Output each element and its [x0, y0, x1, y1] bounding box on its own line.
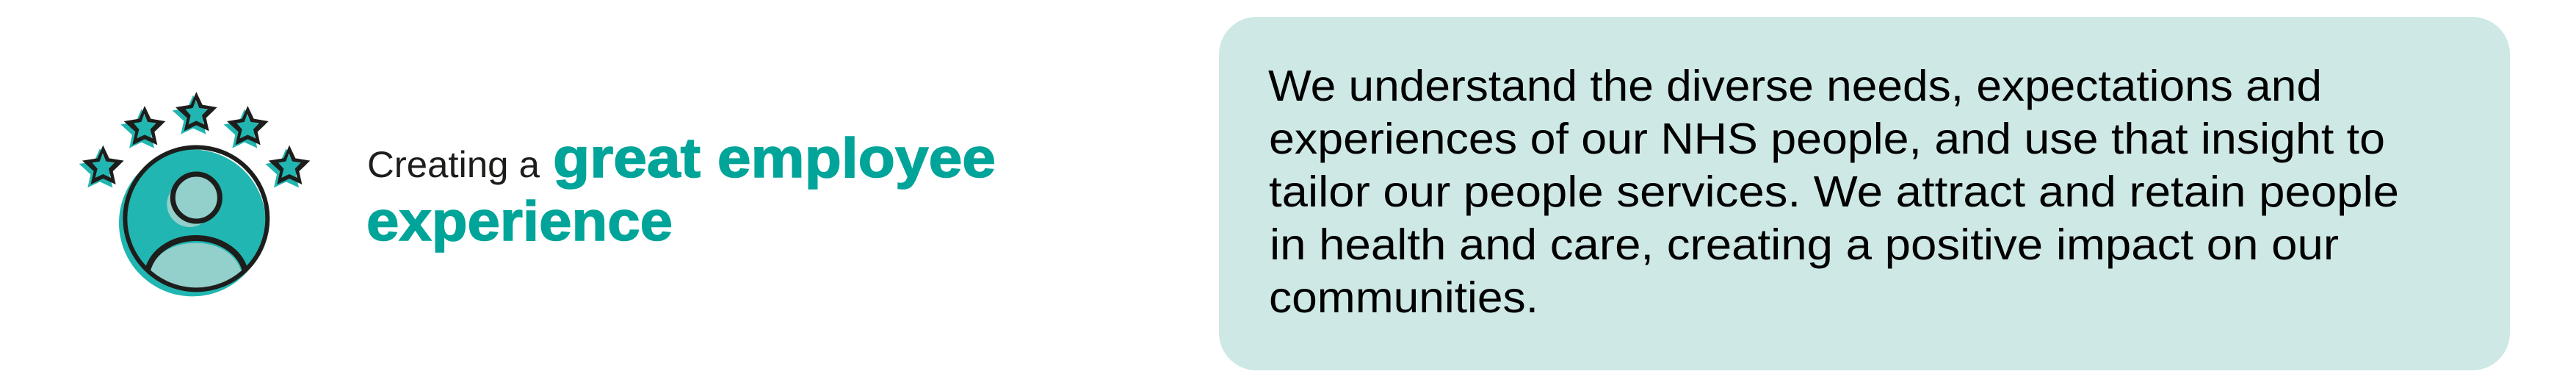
heading emphasis line 1: great employee — [553, 127, 996, 190]
icon: portrait circle — [119, 147, 267, 296]
icon: employee portrait with five stars — [79, 92, 310, 296]
text block: description — [1268, 62, 2399, 322]
icon: star 2 — [120, 106, 165, 148]
heading emphasis line 2: experience — [366, 190, 673, 253]
text block: description: in health and care, creating a positive impact on our — [1270, 220, 2339, 269]
icon: star 1 — [79, 146, 124, 187]
icon: star 5 — [265, 146, 310, 187]
text block: description: We understand the diverse needs, expectations and — [1268, 62, 2322, 110]
heading lead-in: Creating a — [367, 144, 540, 185]
panel: description — [1219, 17, 2510, 370]
text block: description: tailor our people services. We attract and retain people — [1269, 168, 2399, 216]
text block: description: communities. — [1269, 273, 1538, 322]
icon: star 4 — [224, 106, 269, 148]
panel background — [1219, 17, 2510, 370]
heading: creating a great employee experience — [366, 127, 996, 253]
icon: star 3 — [173, 92, 217, 134]
text block: description: experiences of our NHS people, and use that insight to — [1269, 115, 2385, 163]
